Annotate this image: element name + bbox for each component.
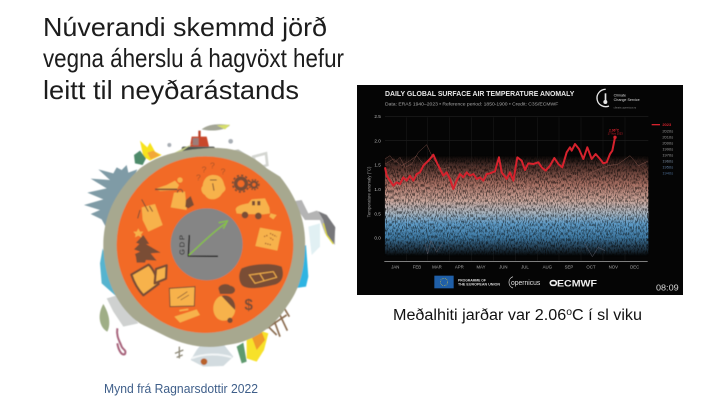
caption: global mean temperature: C í sl viku [572,307,642,324]
grey centre disc [171,208,243,280]
x axis with months: JAN [391,264,399,269]
icon: puzzled head: ? [210,161,215,171]
chain [117,328,125,354]
x axis with months: SEP [565,264,573,269]
Copernicus logo: opernicus [511,280,541,287]
y axis labels: 1.0 [374,187,381,192]
y axis labels: 2.5 [374,114,381,119]
icon: shopping bags [171,189,194,210]
x axis with months: MAY [476,264,486,269]
orange ring of consumption [117,156,293,333]
icon: gears [233,175,259,192]
decade legend: 2023 [662,122,672,127]
decade legend: 1940s [662,171,673,176]
y axis labels: 2.0 [374,138,381,143]
icon: Christmas tree [133,228,161,263]
Climate Change Service logo [597,89,640,110]
x axis with months [384,262,648,269]
icon: puzzled head: ? [221,167,226,177]
faint pink peaks above the mass [385,145,648,181]
icon: woman's head with thought [213,284,235,323]
cool outliers below the mass [425,241,605,257]
title [43,12,344,105]
icon: tote bag [138,199,163,232]
caption: global mean temperature: o [566,307,572,318]
icon: parcel [255,228,281,251]
icon: shoe [155,177,183,191]
water on the left [100,248,125,297]
small details on the ring's top edge [167,139,267,168]
y axis labels [366,114,381,240]
x axis with months: NOV [609,264,618,269]
factory with smoke [182,124,230,152]
Climate Change Service logo: Change Service [614,98,640,102]
olive ground ring [103,148,305,347]
right mountain and rain [292,200,335,255]
decade legend: 1970s [662,153,673,158]
record callout [608,128,623,139]
y axis labels: 0.5 [374,212,381,217]
Climate Change Service logo: Climate [614,94,626,98]
fire at the bottom right [237,331,268,363]
icon: dollar sign: $ [244,297,253,314]
icon: puzzled head: ? [196,173,201,183]
icon: computer [169,287,200,323]
Climate Change Service logo: climate.copernicus.eu [614,107,637,110]
soft colour wash beneath the anomaly lines [386,156,648,256]
decade legend: 1990s [662,147,673,152]
bare tree [175,347,183,358]
x axis with months: JUL [521,264,529,269]
icon: car [236,198,277,219]
grey buildings lower left [107,295,138,327]
x axis with months: FEB [413,264,421,269]
x axis with months: AUG [543,264,553,269]
icon: sofa [239,264,283,288]
grid lines [385,116,648,261]
record callout: 17 Nov 2023 [608,132,623,136]
city skyline on the left [84,165,137,227]
GDP growth chart [177,221,227,256]
water on the right [292,245,308,288]
decade legend: 2020s [662,129,673,134]
record callout: 2.06°C [609,128,620,132]
burned trees [267,307,289,337]
decade legend: 2010s [662,135,673,140]
illustration: damaged earth around GDP [84,124,335,367]
caption: image credit: Mynd frá Ragnarsdottir 2022 [104,382,258,396]
y axis labels: 0.0 [374,235,381,240]
x axis with months: DEC [630,264,639,269]
chart subtitle: Data: ERA5 1940–2023 • Reference period: 1850-1900 • Credit: C3S/ECMWF [385,101,558,106]
consumer icons [131,161,283,323]
chart title: DAILY GLOBAL SURFACE AIR TEMPERATURE ANOMALY [385,89,574,98]
title: leitt til neyðarástands [43,75,299,105]
decade legend [652,122,673,176]
timestamp: 08:09 [656,283,679,293]
title: vegna áherslu á hagvöxt hefur [43,43,344,73]
icon: phone and tablet [131,265,167,295]
caption: global mean temperature: Meðalhiti jarðar var 2.06 [393,307,559,324]
decade legend: 1960s [662,159,673,164]
x axis with months: APR [455,264,464,269]
icon: puzzled head [196,161,226,199]
x axis with months: OCT [586,264,596,269]
2023 line in red [385,137,615,189]
GDP growth chart: GDP [177,235,186,255]
temperature chart panel [357,85,683,295]
decade legend: 1950s [662,165,673,170]
fire at the top left [134,141,162,165]
ECMWF logo: ECMWF [557,279,598,289]
decade legend: 2000s [662,141,673,146]
y axis labels: Temperature anomaly (°C) [366,166,371,217]
y axis labels: 1.5 [374,163,381,168]
leaf [100,304,109,332]
x axis with months: MAR [432,264,442,269]
title: Núverandi skemmd jörð [43,12,327,42]
EU programme logo [434,276,501,288]
EU programme logo: PROGRAMME OF [458,278,486,282]
EU programme logo: THE EUROPEAN UNION [458,282,501,286]
icon: puzzled head: ? [202,165,207,175]
daily anomaly lines for 1940–2022 [385,156,648,256]
x axis with months: JUN [499,264,508,269]
tornado at the bottom [191,342,233,367]
Copernicus logo [509,277,541,288]
